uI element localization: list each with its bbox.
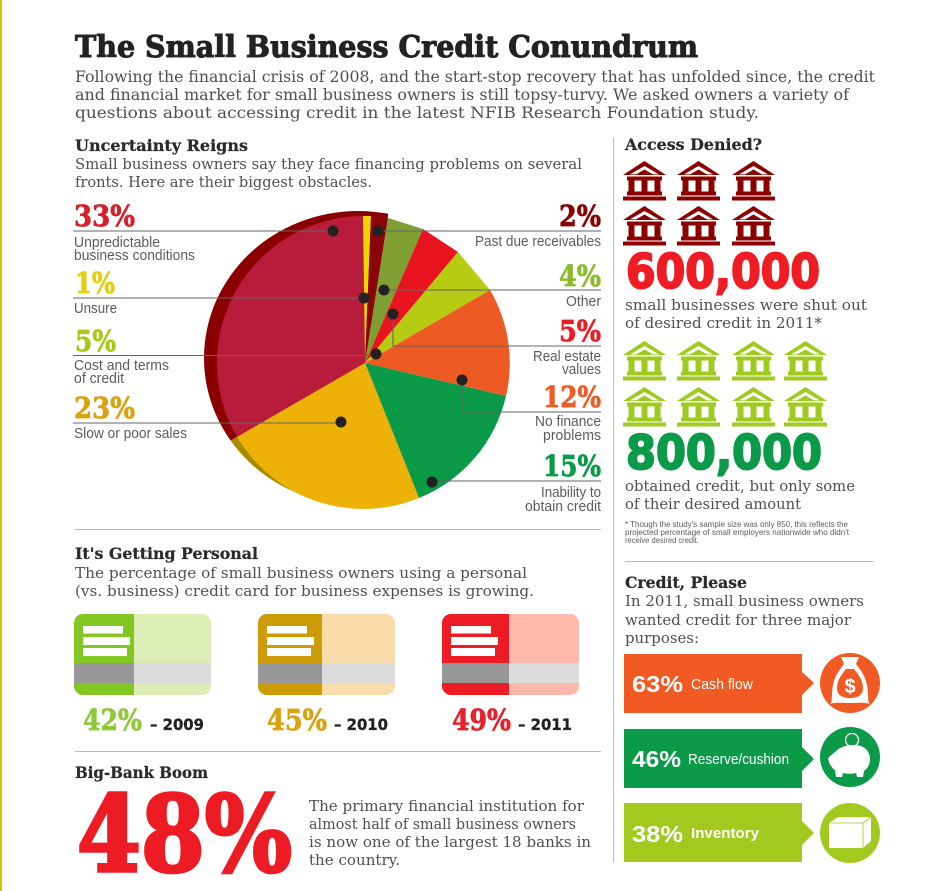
label: 4%: 4%	[559, 259, 601, 293]
text: shut out: of desired credit in 2011*	[625, 314, 822, 332]
label: 23%: 23%	[74, 391, 135, 425]
label: 5% cost and terms	[74, 324, 169, 387]
credit description: In 2011, small business owners	[625, 592, 864, 610]
big-bank description: almost half of small business owners	[309, 815, 576, 833]
label: 5% real estate: values	[562, 362, 601, 378]
label: 15%: Inability to	[541, 485, 601, 501]
icon: box	[820, 803, 880, 863]
text: obtained credit: obtained credit, but only some	[625, 477, 855, 495]
stat: 42% 2009: – 2009	[150, 715, 204, 734]
label: 4%: Other	[566, 294, 601, 310]
label: 1%: Unsure	[74, 301, 117, 317]
label: 12%	[535, 380, 601, 444]
icons: dark red banks	[623, 161, 775, 246]
label: 15%: obtain credit	[525, 499, 601, 515]
pie chart	[204, 211, 512, 509]
label: 33%: business conditions	[74, 248, 195, 264]
panel: it's getting personal	[74, 544, 579, 737]
big-bank description: is now one of the largest 18 banks in	[309, 833, 591, 851]
label: 23%	[74, 391, 187, 442]
label: 1%	[74, 266, 117, 317]
label: 4%	[559, 259, 601, 310]
stat: 45% 2010: 45%	[267, 703, 327, 737]
bar: cash flow: Cash flow	[691, 677, 754, 693]
stat: 45% 2010	[267, 703, 388, 737]
icon: piggy bank	[820, 727, 880, 787]
credit description: wanted credit for three major	[625, 611, 852, 629]
intro text: and financial market for small business owners is still topsy-turvy. We asked owners a variety of	[75, 86, 850, 104]
heading: big-bank boom: Big-Bank Boom	[75, 763, 209, 782]
big-bank description	[309, 797, 591, 869]
intro text: questions about accessing credit in the latest NFIB Research Foundation study.	[75, 104, 759, 122]
uncertainty description	[75, 155, 582, 191]
label: 1%: 1%	[75, 266, 115, 300]
intro text: Following the financial crisis of 2008, and the start-stop recovery that has unfolded since, the credit	[75, 68, 876, 86]
footnote: * Though the study's sample size was only 850, this reflects the	[625, 519, 848, 529]
credit card 2011	[442, 614, 579, 695]
label: 33%	[74, 199, 195, 264]
bar: inventory	[624, 803, 814, 862]
column divider	[612, 138, 614, 862]
personal description	[75, 564, 534, 600]
bar: reserve/cushion	[624, 729, 814, 788]
label: 12%: problems	[543, 428, 601, 444]
credit card 2010	[258, 614, 395, 695]
heading: it's getting personal: It's Getting Personal	[75, 544, 258, 563]
stat: 49% 2011: 49%	[452, 703, 511, 737]
uncertainty description: fronts. Here are their biggest obstacles.	[75, 173, 372, 191]
personal description: (vs. business) credit card for business expenses is growing.	[75, 582, 534, 600]
label: 23%: Slow or poor sales	[74, 426, 187, 442]
stat: 42% 2009: 42%	[83, 703, 142, 737]
text: obtained credit: of their desired amount	[625, 495, 801, 513]
credit description: purposes:	[625, 629, 699, 647]
heading: uncertainty reigns: Uncertainty Reigns	[75, 136, 248, 155]
panel: access denied	[623, 135, 867, 545]
text: shut out: small businesses were shut out	[625, 296, 867, 314]
uncertainty description: Small business owners say they face financing problems on several	[75, 155, 582, 173]
bar: inventory: 38%	[632, 821, 683, 847]
label: 5% real estate: Real estate	[533, 349, 601, 365]
icon: money bag	[820, 653, 880, 713]
label: 15%	[525, 449, 601, 515]
label: 5% real estate	[533, 314, 601, 378]
personal description: The percentage of small business owners using a personal	[75, 564, 527, 582]
label: 5% cost and terms: 5%	[75, 324, 116, 358]
text: shut out	[625, 296, 867, 332]
label: 12%: 12%	[543, 380, 601, 414]
label: 5% cost and terms: Cost and terms	[74, 358, 169, 374]
big number: 600,000: 600,000	[626, 245, 820, 300]
panel: uncertainty reigns	[73, 136, 601, 515]
label: 5% cost and terms: of credit	[74, 371, 124, 387]
big number: 800,000: 800,000	[626, 426, 822, 481]
heading: credit, please: Credit, Please	[625, 573, 747, 592]
label: 2%: 2%	[559, 199, 601, 233]
panel: big-bank boom	[75, 763, 591, 891]
label: 33%: Unpredictable	[74, 235, 160, 251]
stat: 49% 2011	[452, 703, 572, 737]
label: 12%: No finance	[535, 414, 601, 430]
label: 2%: Past due receivables	[475, 234, 601, 250]
icon: money bag: $	[844, 676, 856, 698]
footnote	[625, 519, 850, 545]
stat: 45% 2010: – 2010	[334, 715, 388, 734]
title: The Small Business Credit Conundrum	[75, 30, 698, 65]
icons: green banks	[623, 341, 827, 426]
bar: reserve/cushion: Reserve/cushion	[688, 752, 789, 768]
intro text	[75, 68, 876, 122]
callout lines	[73, 231, 601, 481]
bar: cash flow	[624, 654, 814, 713]
credit card 2009	[74, 614, 211, 695]
credit description	[625, 592, 864, 647]
callout dots	[328, 226, 468, 488]
stat: 42% 2009	[83, 703, 204, 737]
big-bank description: the country.	[309, 851, 400, 869]
label: 33%: 33%	[74, 199, 135, 233]
label: 2%	[475, 199, 601, 250]
footnote: receive desired credit.	[625, 535, 699, 545]
text: obtained credit	[625, 477, 855, 513]
bar: reserve/cushion: 46%	[632, 746, 681, 772]
heading: access denied: Access Denied?	[624, 135, 762, 154]
big-bank description: The primary financial institution for	[309, 797, 585, 815]
label: 5% real estate: 5%	[559, 314, 601, 348]
label: 15%: 15%	[543, 449, 601, 483]
panel: credit, please	[624, 573, 880, 863]
bar: cash flow: 63%	[632, 671, 683, 697]
stat: 49% 2011: – 2011	[518, 715, 572, 734]
bar: inventory: Inventory	[691, 826, 759, 842]
footnote: projected percentage of small employers nationwide who didn't	[625, 527, 850, 537]
